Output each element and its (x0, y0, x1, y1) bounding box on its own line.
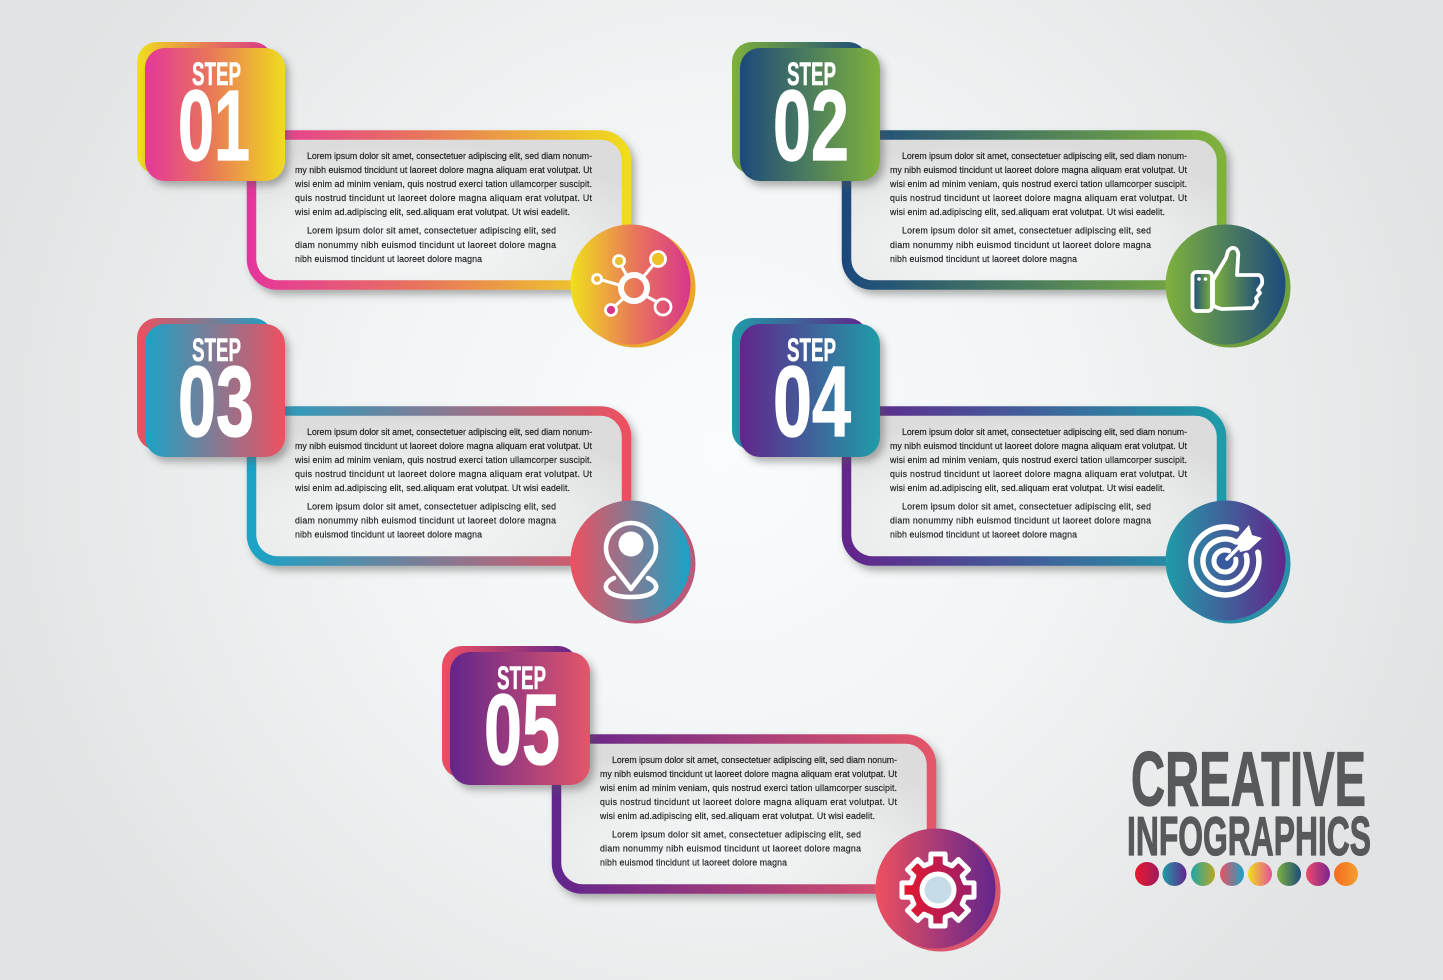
body text: Lorem ipsum dolor sit amet, consectetuer adipiscing elit, sed (902, 502, 1151, 512)
icon circle (570, 224, 690, 344)
body text: diam nonummy nibh euismod tincidunt ut laoreet dolore magna (890, 240, 1151, 250)
body text: diam nonummy nibh euismod tincidunt ut laoreet dolore magna (295, 516, 556, 526)
step label: STEP (192, 56, 241, 92)
step number: 01 (178, 70, 250, 182)
body text: nibh euismod tincidunt ut laoreet dolore magna (600, 858, 787, 868)
back tile (137, 42, 273, 174)
title (1127, 736, 1371, 867)
body text: quis nostrud tincidunt ut laoreet dolore magna aliquam erat volutpat. Ut (295, 193, 593, 203)
text frame (556, 739, 932, 889)
icon: gear (902, 854, 974, 926)
body text: Lorem ipsum dolor sit amet, consectetuer adipiscing elit, sed (307, 226, 556, 236)
body text: diam nonummy nibh euismod tincidunt ut laoreet dolore magna (890, 516, 1151, 526)
body text: Lorem ipsum dolor sit amet, consectetuer adipiscing elit, sed diam nonum- (307, 151, 592, 161)
body text: my nibh euismod tincidunt ut laoreet dolore magna aliquam erat volutpat. Ut (600, 769, 898, 779)
body text: diam nonummy nibh euismod tincidunt ut laoreet dolore magna (600, 844, 861, 854)
body text: wisi enim ad.adipiscing elit, sed.aliquam erat volutpat. Ut wisi eadelit. (889, 483, 1165, 493)
icon circle back (576, 228, 696, 348)
icon circle (1166, 500, 1286, 620)
body text: wisi enim ad.adipiscing elit, sed.aliquam erat volutpat. Ut wisi eadelit. (889, 207, 1165, 217)
body text: wisi enim ad minim veniam, quis nostrud exerci tation ullamcorper suscipit. (889, 455, 1187, 465)
icon: target (1191, 525, 1262, 595)
body text: wisi enim ad.adipiscing elit, sed.aliquam erat volutpat. Ut wisi eadelit. (294, 483, 570, 493)
body text: wisi enim ad.adipiscing elit, sed.aliquam erat volutpat. Ut wisi eadelit. (294, 207, 570, 217)
step number: 03 (178, 346, 254, 458)
icon: thumbs up (1192, 248, 1262, 311)
back tile (442, 646, 578, 778)
body text: my nibh euismod tincidunt ut laoreet dolore magna aliquam erat volutpat. Ut (890, 441, 1188, 451)
colour dots (1135, 862, 1358, 886)
text frame (252, 411, 626, 561)
panel: step 3 (137, 318, 696, 624)
body text: wisi enim ad minim veniam, quis nostrud exerci tation ullamcorper suscipit. (889, 179, 1187, 189)
body text: Lorem ipsum dolor sit amet, consectetuer adipiscing elit, sed diam nonum- (902, 151, 1187, 161)
icon circle back (1170, 228, 1290, 348)
body text: quis nostrud tincidunt ut laoreet dolore magna aliquam erat volutpat. Ut (600, 797, 898, 807)
step label: STEP (497, 660, 546, 696)
body text (889, 427, 1188, 540)
body text: Lorem ipsum dolor sit amet, consectetuer adipiscing elit, sed (902, 226, 1151, 236)
body text: quis nostrud tincidunt ut laoreet dolore magna aliquam erat volutpat. Ut (295, 469, 593, 479)
body text: wisi enim ad minim veniam, quis nostrud exerci tation ullamcorper suscipit. (294, 179, 592, 189)
step tile (145, 324, 285, 457)
text frame (846, 135, 1222, 285)
body text: Lorem ipsum dolor sit amet, consectetuer adipiscing elit, sed diam nonum- (612, 755, 897, 765)
body text: my nibh euismod tincidunt ut laoreet dolore magna aliquam erat volutpat. Ut (295, 441, 593, 451)
icon circle (570, 500, 690, 620)
step label: STEP (787, 56, 836, 92)
icon circle back (880, 832, 1000, 952)
body text: Lorem ipsum dolor sit amet, consectetuer adipiscing elit, sed (612, 830, 861, 840)
panel: step 2 (732, 42, 1290, 348)
body text (599, 755, 898, 868)
body text (889, 151, 1188, 264)
step tile (145, 48, 285, 181)
icon: map pin (606, 523, 656, 597)
step label: STEP (192, 332, 241, 368)
body text: quis nostrud tincidunt ut laoreet dolore magna aliquam erat volutpat. Ut (890, 469, 1188, 479)
body text: nibh euismod tincidunt ut laoreet dolore magna (295, 254, 482, 264)
panel: step 5 (442, 646, 1000, 952)
body text: nibh euismod tincidunt ut laoreet dolore magna (890, 254, 1077, 264)
body text: my nibh euismod tincidunt ut laoreet dolore magna aliquam erat volutpat. Ut (890, 165, 1188, 175)
back tile (137, 318, 273, 450)
step tile (740, 48, 880, 181)
body text: diam nonummy nibh euismod tincidunt ut laoreet dolore magna (295, 240, 556, 250)
body text: Lorem ipsum dolor sit amet, consectetuer adipiscing elit, sed diam nonum- (307, 427, 592, 437)
back tile (732, 318, 868, 450)
icon circle (1166, 224, 1286, 344)
body text: nibh euismod tincidunt ut laoreet dolore magna (890, 530, 1077, 540)
text frame (846, 411, 1222, 561)
step number: 04 (773, 346, 851, 458)
body text: wisi enim ad minim veniam, quis nostrud exerci tation ullamcorper suscipit. (294, 455, 592, 465)
step number: 02 (773, 70, 849, 182)
step number: 05 (484, 674, 560, 786)
step tile (450, 652, 590, 785)
panel: step 1 (137, 42, 696, 348)
body text: nibh euismod tincidunt ut laoreet dolore magna (295, 530, 482, 540)
icon circle (876, 828, 996, 948)
text frame (252, 135, 626, 285)
step label: STEP (787, 332, 836, 368)
icon circle back (1170, 504, 1290, 624)
back tile (732, 42, 868, 174)
body text: quis nostrud tincidunt ut laoreet dolore magna aliquam erat volutpat. Ut (890, 193, 1188, 203)
body text: wisi enim ad.adipiscing elit, sed.aliquam erat volutpat. Ut wisi eadelit. (599, 811, 875, 821)
body text (294, 427, 593, 540)
icon: network (592, 252, 671, 316)
body text: Lorem ipsum dolor sit amet, consectetuer adipiscing elit, sed (307, 502, 556, 512)
body text: wisi enim ad minim veniam, quis nostrud exerci tation ullamcorper suscipit. (599, 783, 897, 793)
body text: Lorem ipsum dolor sit amet, consectetuer adipiscing elit, sed diam nonum- (902, 427, 1187, 437)
icon circle back (576, 504, 696, 624)
body text (294, 151, 593, 264)
step tile (740, 324, 880, 457)
panel: step 4 (732, 318, 1290, 624)
body text: my nibh euismod tincidunt ut laoreet dolore magna aliquam erat volutpat. Ut (295, 165, 593, 175)
